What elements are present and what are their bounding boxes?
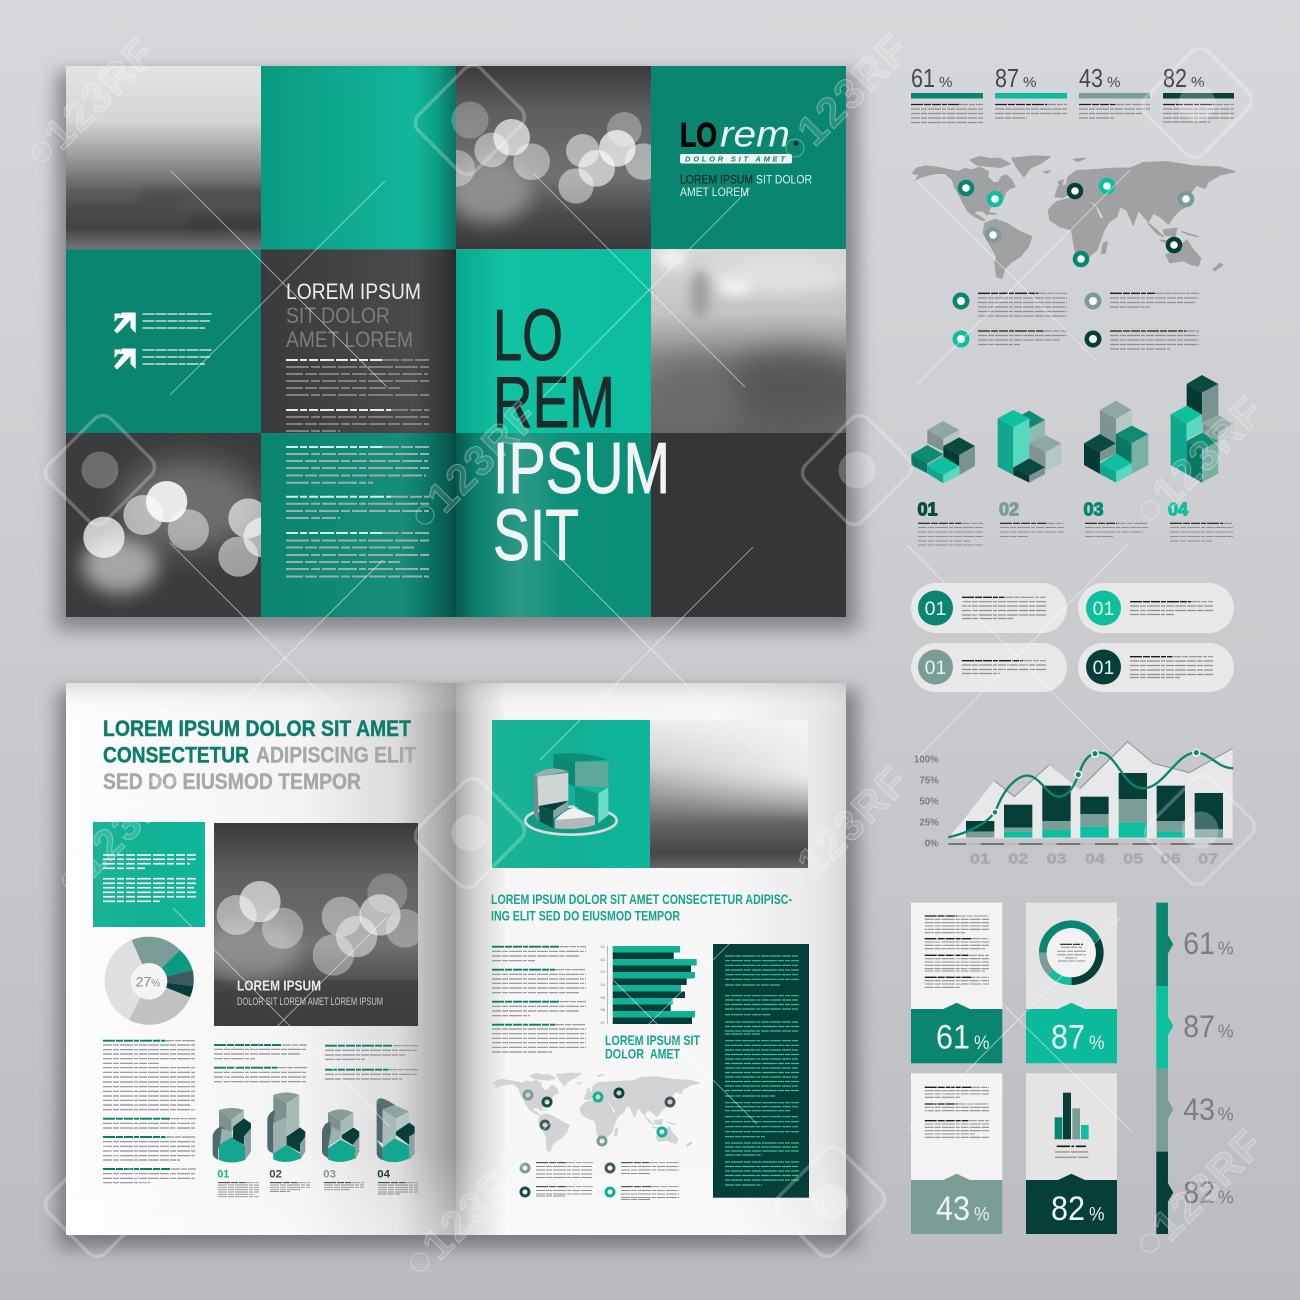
dark text column — [713, 944, 809, 1198]
percent 43 — [1079, 63, 1150, 98]
y axis labels: 25% — [919, 818, 939, 829]
watermark: 123RF logos: 123RF — [413, 1140, 542, 1268]
scale segment 43: % — [1218, 1104, 1234, 1125]
watermark: 123RF logos: 123RF — [418, 393, 547, 521]
cylinder numbers — [217, 1169, 391, 1181]
map legend — [952, 292, 1199, 349]
card 43%: 43 — [936, 1190, 970, 1228]
cylinder captions — [218, 1183, 418, 1197]
cell: teal headline panel — [456, 250, 651, 433]
y axis labels — [914, 754, 939, 850]
left page heading: ADIPISCING ELIT — [256, 742, 416, 768]
cube chart numbers: 04 — [1168, 500, 1188, 520]
cube chart 4 — [1171, 375, 1233, 483]
cube chart 1 — [911, 421, 975, 483]
icon: double arrow two — [114, 348, 136, 370]
scale segment 87: % — [1218, 1021, 1234, 1042]
cylinder 02 — [267, 1092, 305, 1162]
page: left — [66, 683, 456, 1235]
watermark: 123RF logos: 123RF — [1143, 388, 1272, 516]
pill 4: 01 — [1093, 657, 1114, 679]
gradient photo — [650, 720, 808, 868]
x axis — [948, 841, 1233, 846]
world map — [913, 156, 1235, 278]
cube chart 2 — [998, 410, 1062, 483]
teal text box — [93, 822, 205, 927]
cube chart numbers: 01 — [918, 500, 938, 520]
cube chart numbers: 03 — [1084, 500, 1104, 520]
left page text column 2 — [214, 1045, 307, 1082]
dark panel heading: LOREM IPSUM — [286, 279, 421, 304]
combo chart — [914, 742, 1233, 867]
percent 82: % — [1191, 74, 1204, 91]
teal curve — [948, 753, 1233, 837]
percent 82 — [1163, 63, 1234, 98]
left page text column 3 — [325, 1046, 418, 1079]
cover headline: IPSUM — [493, 429, 670, 509]
right page text column — [492, 947, 586, 1052]
left page heading — [103, 716, 416, 794]
arrow text one — [142, 314, 212, 328]
3D pie icon — [525, 753, 617, 835]
dark panel body text — [286, 360, 429, 431]
top percent row — [911, 63, 1234, 122]
teal panel body text — [286, 447, 429, 576]
logo subtitle: LOREM IPSUM — [680, 172, 753, 186]
pill 3 — [911, 643, 1067, 692]
bar axis labels: 05 — [600, 995, 606, 1000]
watermark: 123RF logos: 123RF — [1143, 1121, 1272, 1249]
cell: dark panel with lorem text — [261, 250, 456, 433]
cylinder numbers: 01 — [217, 1169, 229, 1181]
arrow text two — [142, 350, 212, 364]
logo subtitle: SIT DOLOR — [756, 172, 812, 186]
left page text column 1 — [103, 1041, 196, 1183]
small world map — [493, 1073, 700, 1152]
card 87% — [1026, 903, 1117, 1063]
bar chart caption — [605, 1032, 700, 1062]
card 82%: % — [1089, 1204, 1105, 1226]
pill 3: 01 — [925, 657, 946, 679]
y axis labels: 0% — [925, 839, 939, 850]
photo caption: DOLOR SIT LOREM AMET LOREM IPSUM — [237, 996, 383, 1008]
teal image panel — [492, 720, 650, 868]
left page heading: LOREM IPSUM DOLOR SIT AMET — [103, 716, 411, 741]
pill 2 — [1078, 583, 1234, 633]
cylinder numbers: 04 — [377, 1169, 391, 1181]
bar axis labels: 01 — [600, 944, 606, 949]
cell: bokeh photo top — [456, 66, 651, 249]
bar axis labels: 06 — [600, 1007, 606, 1012]
pill 2: 01 — [1093, 598, 1114, 620]
icon: double arrow one — [114, 312, 136, 334]
cell: blurred grey photo — [66, 66, 270, 250]
card 43% — [911, 1073, 1002, 1234]
scale segment 61 — [1156, 903, 1234, 986]
percent 87: % — [1023, 74, 1036, 91]
y axis labels: 100% — [914, 754, 939, 765]
dark panel heading — [286, 279, 421, 352]
percent 87 — [995, 63, 1067, 98]
page: right — [456, 683, 846, 1235]
percent 61: % — [939, 74, 952, 91]
bar axis labels — [600, 944, 606, 1025]
percent 61: 61 — [911, 63, 935, 93]
card 61% — [911, 903, 1002, 1063]
dark panel heading: AMET LOREM — [286, 327, 413, 352]
donut chart — [1039, 921, 1103, 985]
cover shadow — [56, 72, 858, 630]
cube chart numbers — [918, 500, 1188, 520]
cell: bokeh photo bottom — [66, 433, 261, 617]
area background — [948, 742, 1233, 838]
photo caption — [237, 979, 383, 1008]
stat cards — [911, 903, 1117, 1234]
left page heading: CONSECTETUR — [103, 742, 249, 768]
cell: teal text panel — [261, 433, 456, 617]
pie chart 27% — [105, 937, 194, 1025]
scale segment 87: 87 — [1183, 1008, 1215, 1044]
top brochure: cover spread — [56, 66, 870, 630]
right page heading: ING ELIT SED DO EIUSMOD TEMPOR — [491, 909, 680, 924]
cover headline: SIT — [493, 496, 579, 576]
x axis labels: 04 — [1085, 851, 1106, 867]
watermark: diagonal cross lines — [170, 170, 1133, 1133]
x axis labels: 05 — [1123, 851, 1143, 867]
card 82%: 82 — [1051, 1190, 1085, 1228]
grey line series — [994, 742, 1233, 797]
cylinder numbers: 03 — [323, 1169, 336, 1181]
scale segment 82: % — [1218, 1187, 1234, 1208]
scale segment 87 — [1156, 986, 1234, 1068]
scale segment 82: 82 — [1183, 1174, 1215, 1210]
cover headline: REM — [493, 363, 615, 443]
cube chart captions — [918, 523, 1233, 545]
cylinder 01 — [213, 1108, 251, 1162]
percent 87: 87 — [995, 63, 1019, 93]
left page heading: SED DO EIUSMOD TEMPOR — [103, 769, 361, 794]
small map markers — [524, 1089, 674, 1145]
cover headline: LO — [493, 296, 563, 376]
dark panel heading: SIT DOLOR — [286, 303, 390, 328]
small map legend — [521, 1163, 679, 1200]
x axis labels: 01 — [970, 851, 990, 867]
cell: dark empty panel — [651, 433, 846, 617]
horizontal bar chart — [600, 944, 697, 1025]
watermark: 123RF logos: 123RF — [788, 758, 917, 886]
cell: teal panel — [261, 66, 456, 250]
logo subtitle: AMET LOREM — [680, 185, 749, 199]
pill 1 — [911, 583, 1067, 633]
logo: Lorem: LO — [680, 116, 717, 154]
percent 82: 82 — [1163, 63, 1187, 93]
x axis labels: 02 — [1008, 851, 1028, 867]
card 82% — [1026, 1073, 1117, 1234]
percent row captions — [911, 104, 1234, 122]
cube chart 3 — [1084, 401, 1148, 483]
scale segment 43: 43 — [1183, 1091, 1215, 1127]
cell: blurred landscape photo — [651, 249, 846, 433]
cylinder numbers: 02 — [269, 1169, 282, 1181]
x axis labels — [970, 851, 1218, 867]
mini bar chart — [1055, 1093, 1089, 1157]
right page image banner — [492, 720, 808, 868]
photo caption: LOREM IPSUM — [237, 979, 321, 995]
y axis labels: 50% — [919, 797, 939, 808]
curve points — [992, 749, 1200, 815]
percent 43: % — [1107, 74, 1120, 91]
scale segment 61: 61 — [1183, 925, 1215, 961]
cube chart numbers: 02 — [999, 500, 1019, 520]
card 61%: % — [974, 1033, 990, 1054]
bar axis labels: 04 — [600, 982, 606, 987]
page top shading — [66, 683, 846, 1235]
card 87%: % — [1089, 1033, 1105, 1054]
y axis labels: 75% — [919, 775, 939, 786]
cell: teal logo panel — [651, 66, 846, 250]
right page heading: LOREM IPSUM DOLOR SIT AMET CONSECTETUR ADIPISC- — [491, 892, 792, 907]
pill list — [911, 583, 1234, 692]
bar chart caption: LOREM IPSUM SIT — [605, 1032, 700, 1048]
bar chart caption: AMET — [650, 1046, 680, 1062]
cover headline — [493, 296, 670, 576]
bars — [966, 773, 1223, 838]
card 87%: 87 — [1051, 1018, 1085, 1056]
watermark: 123RF logos: 123RF — [788, 26, 917, 154]
isometric cube charts — [911, 375, 1233, 483]
card 43%: % — [974, 1204, 990, 1226]
logo subtitle — [680, 172, 812, 199]
bokeh photo with caption — [200, 823, 424, 1026]
bar axis labels: 03 — [600, 969, 606, 974]
logo: Lorem: rem — [720, 114, 790, 154]
logo: Lorem: DOLOR SIT AMET — [685, 155, 786, 164]
watermark: 123RF logos: 123RF — [35, 30, 164, 158]
bar axis labels: 02 — [600, 957, 606, 962]
pill 4 — [1078, 643, 1234, 692]
3D cylinder charts — [213, 1092, 415, 1181]
pie chart 27%: 27% — [136, 974, 160, 990]
bar chart caption: DOLOR — [605, 1046, 644, 1062]
cylinder 03 — [322, 1109, 359, 1162]
x axis labels: 03 — [1047, 851, 1067, 867]
x axis labels: 07 — [1198, 851, 1218, 867]
percent 61 — [911, 63, 983, 98]
cylinder 04 — [377, 1098, 415, 1162]
scale segment 43 — [1156, 1068, 1234, 1152]
pill 1: 01 — [925, 598, 946, 620]
x axis labels: 06 — [1161, 851, 1181, 867]
card 61%: 61 — [936, 1018, 970, 1056]
percent 43: 43 — [1079, 63, 1103, 93]
inner spread shadow — [58, 690, 858, 1248]
bar axis labels: 07 — [600, 1020, 606, 1025]
watermark: 123RF logos: 123RF — [65, 758, 194, 886]
logo: Lorem — [680, 114, 798, 164]
right page heading — [491, 892, 792, 924]
cell: teal bottom panel — [456, 433, 651, 617]
scale segment 61: % — [1218, 938, 1234, 959]
vertical percent scale — [1156, 903, 1234, 1234]
scale segment 82 — [1156, 1152, 1234, 1234]
cell: teal panel with arrows — [66, 250, 261, 433]
bottom brochure: inner spread — [58, 683, 858, 1248]
map markers — [958, 178, 1194, 267]
